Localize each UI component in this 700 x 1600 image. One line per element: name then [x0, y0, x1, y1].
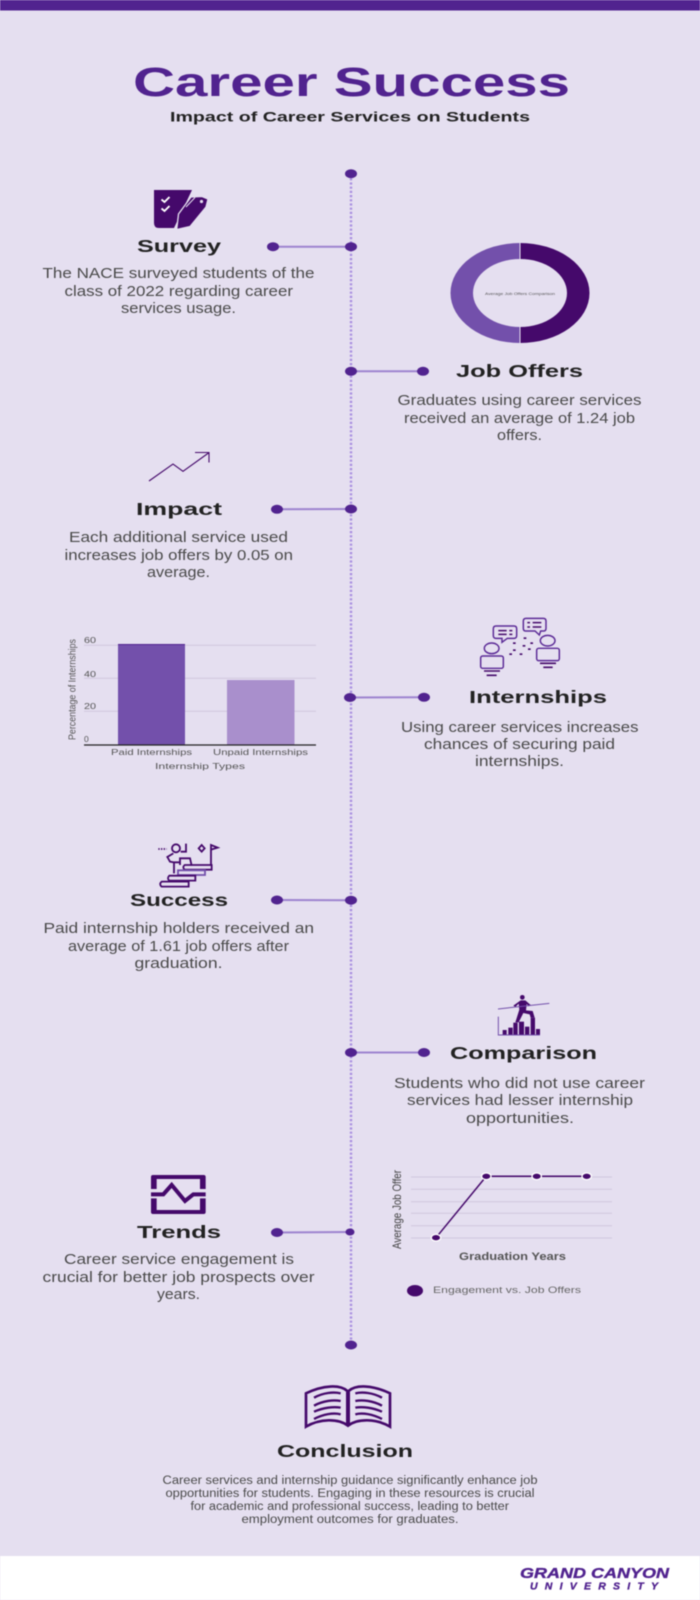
text: success: graduation. — [134, 956, 222, 972]
text: job offers: Graduates using career services — [398, 393, 642, 409]
text: internships: Using career services increases — [401, 720, 638, 736]
chart: internship types bar chart — [68, 635, 316, 771]
chart: job offers donut — [451, 243, 590, 343]
x axis labels — [111, 747, 308, 771]
bar: unpaid internships — [227, 680, 294, 745]
panel: conclusion — [162, 1386, 538, 1526]
y axis ticks — [84, 635, 96, 744]
connector: success — [271, 896, 357, 905]
text: impact: increases job offers by 0.05 on — [64, 548, 293, 564]
heading: internships: Internships — [469, 687, 607, 707]
panel: success — [44, 844, 314, 972]
y axis title: Average Job Offer — [390, 1170, 404, 1249]
text: job offers: received an average of 1.24 job — [404, 411, 635, 427]
text: survey: class of 2022 regarding career — [64, 284, 293, 300]
timeline spine — [345, 169, 357, 1350]
y axis ticks: 40 — [84, 669, 96, 679]
icon: rising trend arrow — [149, 452, 209, 481]
panel: impact — [64, 452, 293, 581]
subtitle: Impact of Career Services on Students — [170, 108, 530, 124]
legend — [407, 1285, 582, 1296]
text: internships — [401, 720, 638, 770]
text: comparison: opportunities. — [466, 1111, 574, 1127]
text: success: Paid internship holders received an — [44, 921, 314, 937]
heading: conclusion: Conclusion — [277, 1441, 413, 1461]
icon: checklist and pen — [154, 190, 208, 230]
connector: comparison — [345, 1048, 430, 1057]
heading: trends: Trends — [137, 1222, 221, 1242]
y axis ticks: 0 — [84, 734, 89, 744]
connector: survey — [267, 242, 357, 251]
icon: balancing on bar chart — [498, 995, 549, 1035]
icon: open book — [306, 1386, 390, 1427]
x axis labels: Paid Internships — [111, 747, 192, 757]
text: trends: crucial for better job prospects over — [42, 1270, 315, 1286]
y axis title: Percentage of Internships — [68, 639, 78, 740]
text: job offers: offers. — [497, 428, 542, 444]
connector: job offers — [345, 367, 429, 376]
text: comparison: services had lesser internship — [407, 1093, 633, 1109]
heading: comparison: Comparison — [450, 1043, 597, 1063]
text: survey — [42, 266, 314, 317]
connector: internships — [344, 693, 430, 702]
logo: Grand Canyon University: GRAND CANYON — [520, 1565, 670, 1582]
panel: comparison — [394, 995, 645, 1127]
text: conclusion: for academic and professional success, leading to better — [190, 1501, 509, 1513]
connector: trends — [271, 1228, 354, 1237]
title: Career Success — [133, 59, 570, 105]
x axis title: Graduation Years — [459, 1251, 566, 1263]
text: trends: Career service engagement is — [64, 1252, 294, 1268]
legend: Engagement vs. Job Offers — [433, 1285, 582, 1295]
icon: pulse in frame — [151, 1175, 206, 1214]
x axis labels: Unpaid Internships — [213, 747, 308, 757]
panel: survey — [42, 190, 314, 317]
data line — [431, 1173, 591, 1241]
text: impact: Each additional service used — [69, 530, 288, 546]
text: conclusion — [162, 1475, 538, 1526]
icon: climbing stacked books — [158, 844, 218, 887]
top bar — [0, 0, 700, 10]
text: job offers — [398, 393, 642, 444]
logo: Grand Canyon University — [520, 1565, 670, 1592]
x axis labels: Internship Types — [155, 761, 245, 771]
text: impact: average. — [147, 565, 210, 581]
text: trends: years. — [157, 1287, 200, 1303]
text: success: average of 1.61 job offers after — [68, 939, 289, 955]
text: conclusion: opportunities for students. Engaging in these resources is crucial — [166, 1488, 534, 1500]
chart: job offers donut: Average Job Offers Comparison — [485, 291, 555, 296]
text: conclusion: Career services and internship guidance significantly enhance job — [162, 1475, 538, 1487]
y axis ticks: 60 — [84, 635, 96, 645]
panel: trends — [42, 1175, 315, 1303]
heading: impact: Impact — [136, 499, 222, 519]
text: internships: internships. — [475, 754, 564, 770]
panel: internships — [401, 618, 638, 770]
text: survey: services usage. — [121, 301, 236, 317]
heading: survey: Survey — [137, 236, 221, 256]
logo: Grand Canyon University: UNIVERSITY — [530, 1580, 659, 1592]
text: comparison — [394, 1076, 645, 1127]
panel: job offers — [398, 361, 642, 444]
connector: impact — [271, 504, 357, 514]
heading: success: Success — [130, 890, 228, 910]
text: success — [44, 921, 314, 972]
text: conclusion: employment outcomes for graduates. — [242, 1514, 458, 1526]
icon: people exchanging messages — [481, 618, 559, 675]
text: impact — [64, 530, 293, 581]
text: internships: chances of securing paid — [424, 737, 615, 753]
text: survey: The NACE surveyed students of the — [42, 266, 314, 282]
heading: job offers: Job Offers — [456, 361, 583, 381]
y axis ticks: 20 — [84, 701, 96, 711]
chart: engagement line chart — [390, 1170, 612, 1296]
text: trends — [42, 1252, 315, 1303]
bar: paid internships — [118, 644, 185, 745]
footer band — [0, 1556, 700, 1600]
text: comparison: Students who did not use career — [394, 1076, 645, 1092]
